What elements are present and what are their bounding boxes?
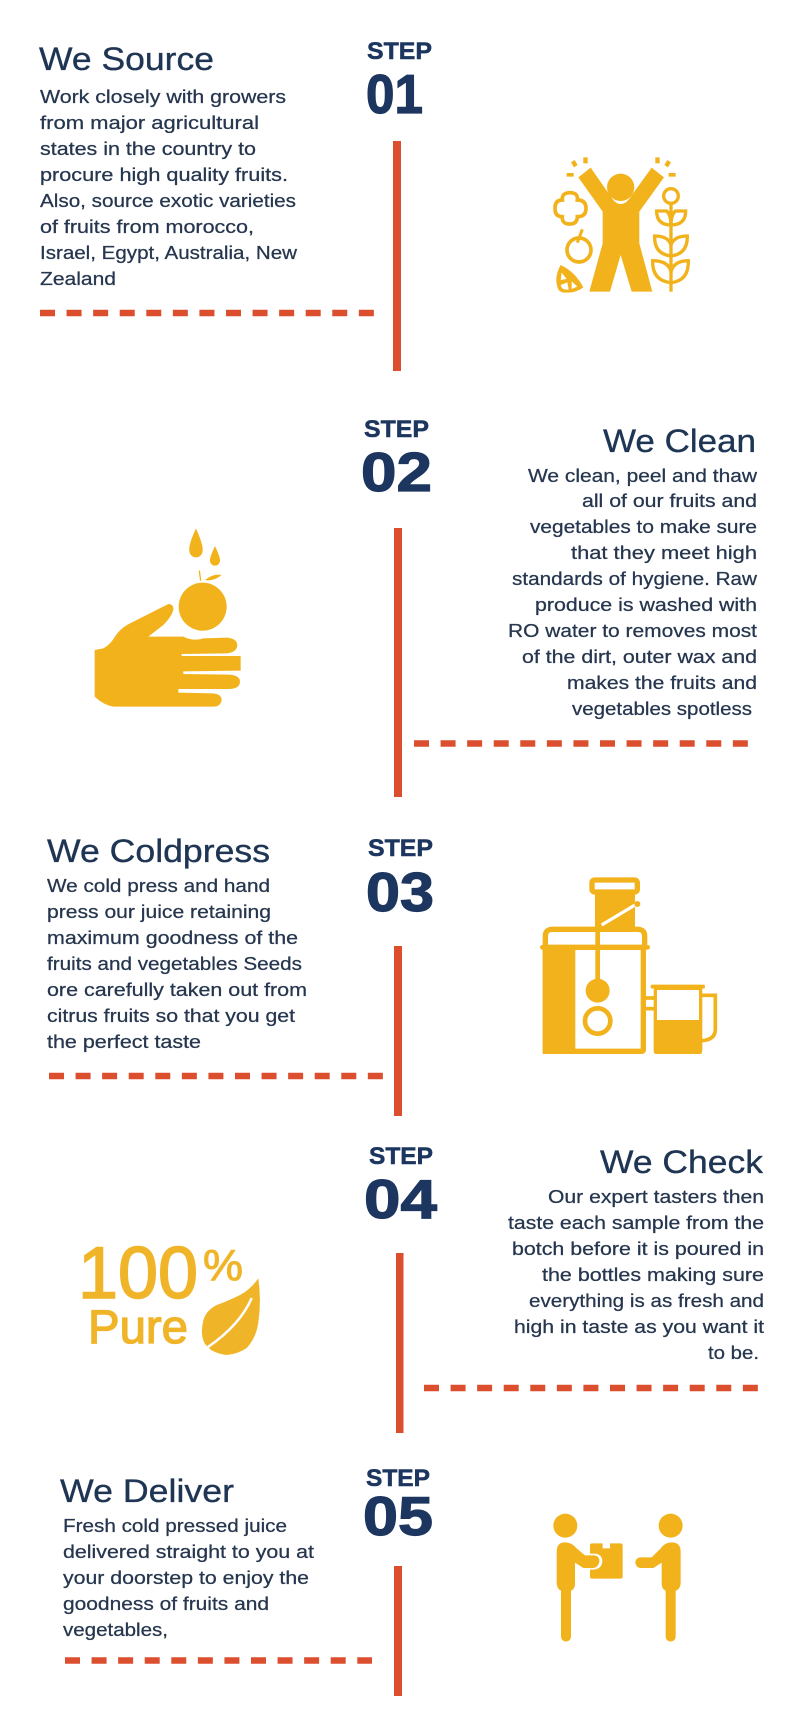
text block: we source description: Israel, Egypt, Australia, New (40, 243, 298, 263)
step label 01: STEP (367, 38, 432, 65)
panel: step 4 we check (78, 1143, 764, 1433)
panel: step 2 we clean (95, 416, 758, 797)
text block: we coldpress description: citrus fruits so that you get (47, 1006, 295, 1026)
text block: we check description: to be. (708, 1343, 759, 1363)
step label 05: 05 (363, 1485, 433, 1547)
vertical connector (394, 528, 402, 797)
icon: 100% pure leaf: Pure (88, 1300, 188, 1353)
text block: we clean description (508, 466, 758, 719)
text block: we deliver description: vegetables, (63, 1620, 168, 1640)
text block: we coldpress description: press our juice retaining (47, 902, 271, 922)
step label 04 (364, 1143, 437, 1230)
step label 01: 01 (366, 63, 423, 125)
panel: step 3 we coldpress (47, 833, 715, 1116)
text block: we source description: of fruits from morocco, (40, 217, 254, 237)
dashed divider (40, 310, 375, 316)
text block: we coldpress description (47, 876, 307, 1052)
heading: we deliver: We Deliver (60, 1473, 234, 1509)
text block: we deliver description (63, 1516, 314, 1640)
icon: 100% pure leaf (78, 1233, 260, 1355)
text block: we coldpress description: ore carefully taken out from (47, 980, 307, 1000)
text block: we source description: Work closely with growers (40, 87, 286, 107)
text block: we source description (40, 87, 298, 289)
text block: we check description: Our expert tasters then (548, 1187, 764, 1207)
text block: we source description: states in the country to (40, 139, 256, 159)
heading: we source: We Source (39, 41, 214, 77)
text block: we coldpress description: fruits and vegetables Seeds (47, 954, 302, 974)
text block: we check description: botch before it is poured in (512, 1239, 764, 1259)
text block: we clean description: vegetables to make sure (530, 517, 757, 537)
step label 02: 02 (361, 441, 432, 503)
panel: step 1 we source (39, 38, 688, 371)
heading: we coldpress: We Coldpress (47, 833, 270, 869)
text block: we deliver description: goodness of fruits and (63, 1594, 269, 1614)
icon: hand with fruit and water drops (95, 528, 241, 707)
text block: we check description: high in taste as you want it (514, 1317, 764, 1337)
text block: we check description: taste each sample from the (508, 1213, 764, 1233)
vertical connector (394, 946, 402, 1116)
step label 03: STEP (368, 835, 433, 862)
text block: we source description: procure high quality fruits. (40, 165, 288, 185)
step label 03: 03 (366, 861, 434, 923)
text block: we deliver description: your doorstep to enjoy the (63, 1568, 309, 1588)
heading: we clean: We Clean (603, 423, 756, 459)
heading: we check: We Check (600, 1144, 764, 1180)
text block: we coldpress description: maximum goodness of the (47, 928, 298, 948)
text block: we deliver description: Fresh cold pressed juice (63, 1516, 287, 1536)
step label 04: 04 (364, 1168, 437, 1230)
step label 02: STEP (364, 416, 429, 443)
text block: we clean description: produce is washed with (535, 595, 757, 615)
icon: person with fruits and wheat (555, 157, 688, 293)
text block: we clean description: We clean, peel and thaw (528, 466, 758, 486)
dashed divider (49, 1073, 385, 1079)
dashed divider (424, 1385, 759, 1391)
icon: 100% pure leaf: % (203, 1241, 243, 1290)
text block: we clean description: vegetables spotless (572, 699, 752, 719)
icon: juicer and jug (540, 880, 715, 1054)
text block: we clean description: RO water to removes most (508, 621, 757, 641)
text block: we deliver description: delivered straight to you at (63, 1542, 314, 1562)
text block: we source description: Zealand (40, 269, 116, 289)
text block: we source description: from major agricultural (40, 113, 259, 133)
step label 03 (366, 835, 434, 923)
vertical connector (396, 1253, 404, 1433)
step label 01 (366, 38, 432, 125)
icon: 100% pure leaf: 100 (78, 1233, 198, 1314)
dashed divider (65, 1657, 372, 1664)
text block: we check description (508, 1187, 764, 1363)
text block: we clean description: makes the fruits and (567, 673, 757, 693)
text block: we clean description: all of our fruits and (582, 491, 757, 511)
text block: we coldpress description: the perfect taste (47, 1032, 201, 1052)
text block: we check description: everything is as fresh and (529, 1291, 764, 1311)
text block: we clean description: standards of hygiene. Raw (512, 569, 758, 589)
text block: we clean description: that they meet high (571, 543, 757, 563)
vertical connector (394, 1566, 402, 1696)
panel: step 5 we deliver (60, 1465, 683, 1696)
step label 04: STEP (369, 1143, 433, 1170)
dashed divider (414, 740, 749, 747)
icon: two people handing over a parcel (553, 1514, 683, 1637)
step label 05: STEP (366, 1465, 430, 1492)
vertical connector (393, 141, 401, 371)
text block: we clean description: of the dirt, outer wax and (522, 647, 757, 667)
text block: we coldpress description: We cold press and hand (47, 876, 270, 896)
text block: we check description: the bottles making sure (542, 1265, 764, 1285)
step label 02 (361, 416, 432, 503)
step label 05 (363, 1465, 433, 1547)
text block: we source description: Also, source exotic varieties (40, 191, 296, 211)
